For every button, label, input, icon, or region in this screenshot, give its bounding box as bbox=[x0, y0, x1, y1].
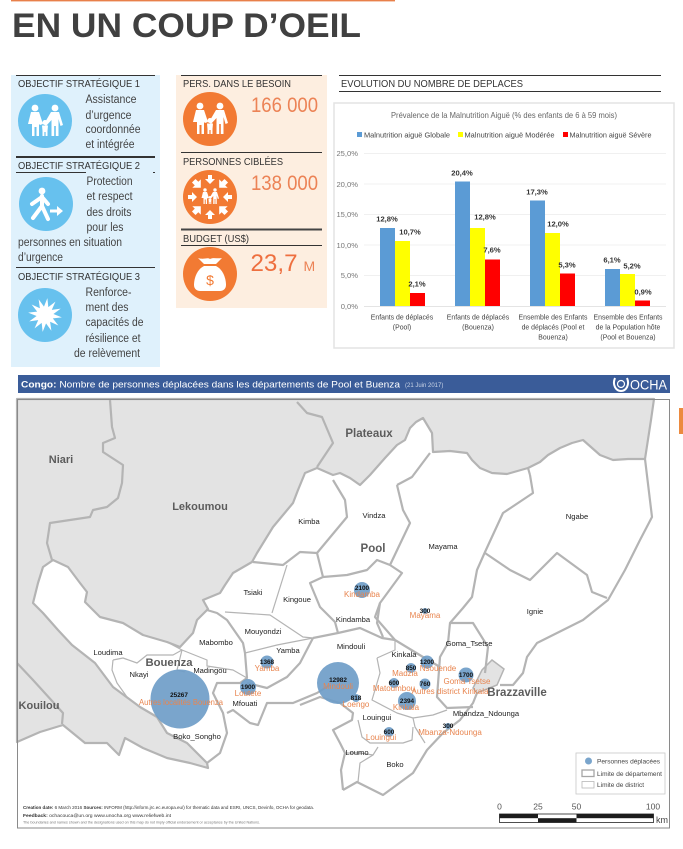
orange locality labels: Nsouende bbox=[420, 664, 457, 673]
map footer notes: Creation date: 6 March 2016 Sources: INFORM (http://inform.jrc.ec.europa.eu/) for thematic data and ESRI, UNCS, Devinfo, OCHA for geodata. bbox=[23, 805, 314, 810]
scale bar: 25 bbox=[533, 802, 543, 812]
objectif stratégique 1: OBJECTIF STRATÉGIQUE 1 bbox=[18, 77, 140, 90]
circle values: 1900 bbox=[241, 684, 256, 691]
circle values: 1368 bbox=[260, 659, 275, 666]
department boundaries bbox=[17, 400, 652, 795]
objectif stratégique 3: OBJECTIF STRATÉGIQUE 3 bbox=[18, 270, 140, 283]
circle values: 2394 bbox=[400, 698, 415, 705]
bars: enfants de déplacés (Pool): 12,8% bbox=[376, 214, 398, 224]
district labels: Loumo bbox=[345, 748, 369, 757]
y axis labels: 25,0% bbox=[336, 149, 358, 158]
chart legend: Malnutrition aiguë Sévère bbox=[570, 130, 652, 140]
map legend: Personnes déplacées bbox=[597, 758, 660, 766]
map footer notes bbox=[23, 805, 314, 824]
category labels bbox=[371, 314, 663, 342]
bars: ensemble des enfants de la population hôte: 6,1% bbox=[603, 256, 621, 264]
title: EN UN COUP D’OEIL bbox=[12, 7, 361, 45]
circle values: 25267 bbox=[170, 692, 188, 699]
budget: BUDGET (US$) bbox=[183, 234, 249, 245]
district labels: Loudima bbox=[93, 648, 123, 657]
y axis labels: 5,0% bbox=[341, 271, 358, 280]
neighbouring departments in gray bbox=[17, 399, 654, 768]
chart legend: Malnutrition aiguë Modérée bbox=[464, 130, 554, 140]
bars: enfants de déplacés (Bouenza): 7,6% bbox=[483, 246, 501, 254]
bars: enfants de déplacés (Bouenza): 20,4% bbox=[451, 168, 473, 178]
chart title: Prévalence de la Malnutrition Aiguë (% des enfants de 6 à 59 mois) bbox=[391, 110, 617, 120]
department labels bbox=[19, 428, 547, 712]
bars: enfants de déplacés (Bouenza) bbox=[451, 168, 501, 306]
district labels: Ngabe bbox=[566, 512, 588, 521]
district labels: Mayama bbox=[428, 542, 458, 551]
chart legend bbox=[357, 130, 652, 140]
orange locality labels: Mindouli bbox=[323, 682, 353, 691]
circle values: 760 bbox=[420, 681, 431, 688]
budget: M bbox=[304, 258, 315, 274]
bars: ensemble des enfants de la population hôte bbox=[603, 256, 652, 306]
scale bar: km bbox=[656, 815, 668, 825]
category labels: (Pool) bbox=[393, 324, 411, 332]
district labels: Kinkala bbox=[392, 650, 417, 659]
orange locality labels: Mbanza-Ndounga bbox=[418, 728, 482, 737]
map title banner bbox=[18, 375, 670, 393]
district labels: Louingui bbox=[363, 713, 392, 722]
bars: enfants de déplacés (Bouenza): 12,8% bbox=[474, 212, 496, 222]
district labels bbox=[93, 511, 588, 769]
objectif stratégique 2: OBJECTIF STRATÉGIQUE 2 bbox=[18, 159, 140, 172]
circle values: 850 bbox=[406, 665, 417, 672]
objectif stratégique 1: coordonnée bbox=[86, 124, 140, 136]
budget: 23,7 bbox=[250, 250, 298, 277]
orange locality labels: Madzia bbox=[392, 669, 418, 678]
district labels: Kimba bbox=[298, 517, 321, 526]
department labels: Bouenza bbox=[145, 657, 193, 669]
map footer notes: Feedback: ochacouca@un.org www.unocha.org www.reliefweb.int bbox=[23, 813, 172, 818]
objectif stratégique 1: Assistance bbox=[86, 94, 136, 106]
personnes ciblées bbox=[181, 152, 322, 224]
objectif stratégique 3: ment des bbox=[86, 302, 129, 314]
scale bar bbox=[497, 802, 668, 825]
department labels: Kouilou bbox=[19, 700, 59, 712]
department labels: Plateaux bbox=[345, 428, 393, 440]
scale bar: 0 bbox=[497, 802, 502, 812]
objectif stratégique 1: et intégrée bbox=[86, 139, 134, 151]
district labels: Mfouati bbox=[233, 699, 258, 708]
orange locality labels: Goma Tsetse bbox=[444, 677, 491, 686]
district labels: Mindouli bbox=[337, 642, 365, 651]
district labels: Yamba bbox=[276, 646, 301, 655]
Brazzaville area bbox=[473, 660, 504, 693]
bars: enfants de déplacés (Pool) bbox=[376, 214, 426, 306]
orange locality labels: Louingui bbox=[366, 733, 396, 742]
y axis labels: 20,0% bbox=[336, 180, 358, 189]
objectif stratégique 2: d’urgence bbox=[18, 252, 63, 264]
district labels: Kindamba bbox=[336, 615, 371, 624]
objectif stratégique 2: pour les bbox=[86, 222, 124, 234]
scale bar: 100 bbox=[646, 802, 660, 812]
y axis labels bbox=[336, 149, 358, 311]
objectif stratégique 2 bbox=[16, 156, 155, 264]
scale bar: 50 bbox=[572, 802, 581, 812]
category labels: Enfants de déplacés bbox=[371, 314, 434, 322]
objectif stratégique 3: Renforce- bbox=[86, 287, 132, 299]
orange locality labels: Yamba bbox=[255, 664, 280, 673]
proportional circles: personnes déplacées bbox=[150, 582, 474, 737]
category labels: Ensemble des Enfants bbox=[594, 314, 663, 322]
y axis labels: 15,0% bbox=[336, 210, 358, 219]
circle values: 300 bbox=[420, 608, 431, 615]
map: déplacés Pool et Bouenza bbox=[17, 399, 670, 828]
panel: chiffres clés bbox=[176, 75, 327, 308]
map title banner: (21 Juin 2017) bbox=[405, 383, 443, 389]
category labels: Bouenza) bbox=[538, 334, 568, 342]
district labels: Nkayi bbox=[130, 670, 149, 679]
heading: évolution du nombre de déplacés: EVOLUTION DU NOMBRE DE DEPLACES bbox=[341, 79, 523, 90]
orange side tab bbox=[679, 408, 683, 434]
bars: ensemble des enfants de la population hôte: 5,2% bbox=[623, 262, 641, 270]
objectif stratégique 2: des droits bbox=[86, 207, 132, 219]
category labels: (Bouenza) bbox=[462, 324, 494, 332]
bar chart: prévalence de la malnutrition aiguë bbox=[334, 103, 674, 348]
orange locality labels: Loutete bbox=[235, 689, 262, 698]
orange locality labels: Autres localités Bouenza bbox=[139, 698, 224, 707]
circle values: 1700 bbox=[459, 672, 474, 679]
objectif stratégique 3: résilience et bbox=[86, 333, 141, 345]
personnes dans le besoin: 166 000 bbox=[251, 93, 318, 117]
map title banner: OCHA bbox=[630, 376, 668, 392]
district labels: Ignie bbox=[527, 607, 543, 616]
bars: ensemble des enfants de déplacés: 5,3% bbox=[558, 260, 576, 270]
personnes dans le besoin: PERS. DANS LE BESOIN bbox=[183, 79, 291, 90]
circle values: 600 bbox=[389, 680, 400, 687]
map legend bbox=[576, 753, 665, 794]
orange locality labels bbox=[139, 590, 491, 742]
personnes ciblées: PERSONNES CIBLÉES bbox=[183, 155, 283, 168]
bars: ensemble des enfants de déplacés: 12,0% bbox=[547, 220, 569, 228]
category labels: de la Population hôte bbox=[596, 324, 661, 332]
department labels: Niari bbox=[49, 454, 73, 466]
district labels: Boko_Songho bbox=[173, 732, 221, 741]
circle values: 12982 bbox=[329, 677, 347, 684]
category labels: de déplacés (Pool et bbox=[522, 324, 584, 332]
personnes ciblées: 138 000 bbox=[251, 171, 318, 195]
district labels: Goma_Tsetse bbox=[446, 639, 492, 648]
category labels: (Pool et Bouenza) bbox=[600, 334, 656, 342]
map legend: Limite de département bbox=[597, 771, 662, 778]
district labels: Madingou bbox=[193, 666, 227, 675]
bars: enfants de déplacés (Pool): 2,1% bbox=[408, 280, 426, 288]
circle values: 300 bbox=[443, 723, 454, 730]
department labels: Brazzaville bbox=[487, 687, 547, 699]
objectif stratégique 3: de relèvement bbox=[74, 348, 141, 360]
icon: UN emblem bbox=[614, 378, 628, 391]
personnes dans le besoin bbox=[181, 75, 322, 146]
objectif stratégique 1: d’urgence bbox=[86, 110, 132, 122]
district labels: Vindza bbox=[362, 511, 386, 520]
y axis labels: 0,0% bbox=[341, 302, 358, 311]
orange locality labels: Autres district Kinkala bbox=[412, 687, 489, 696]
objectif stratégique 1 bbox=[16, 75, 155, 151]
district labels: Mouyondzi bbox=[245, 627, 282, 636]
orange locality labels: Kinkala bbox=[393, 703, 420, 712]
orange locality labels: Matoumbou bbox=[373, 684, 415, 693]
objectif stratégique 2: personnes en situation bbox=[18, 237, 122, 249]
bars: ensemble des enfants de déplacés: 17,3% bbox=[526, 188, 548, 196]
map footer notes: The boundaries and names shown and the designations used on this map do not imply official endorsement or acceptance by the United Nations. bbox=[23, 820, 260, 824]
circle values: 2100 bbox=[355, 585, 370, 592]
objectif stratégique 2: et respect bbox=[86, 191, 133, 203]
department labels: Pool bbox=[361, 543, 385, 555]
map title banner: Congo: Nombre de personnes déplacées dans les départements de Pool et Buenza bbox=[21, 380, 401, 390]
circle values: 600 bbox=[384, 729, 395, 736]
orange locality labels: Mayama bbox=[410, 611, 441, 620]
orange locality labels: Kindamba bbox=[344, 590, 381, 599]
circle values: 818 bbox=[351, 695, 362, 702]
district labels: Mabombo bbox=[199, 638, 233, 647]
objectif stratégique 2: Protection bbox=[86, 176, 132, 188]
circle values bbox=[170, 585, 474, 736]
panel: objectifs stratégiques bbox=[11, 75, 160, 367]
district labels: Tsiaki bbox=[244, 588, 263, 597]
bars: ensemble des enfants de la population hôte: 0,9% bbox=[634, 288, 652, 296]
category labels: Ensemble des Enfants bbox=[519, 314, 588, 322]
objectif stratégique 3 bbox=[16, 267, 155, 360]
category labels: Enfants de déplacés bbox=[447, 314, 510, 322]
district labels: Boko bbox=[386, 760, 404, 769]
map legend: Limite de district bbox=[597, 782, 644, 789]
chart legend: Malnutrition aiguë Globale bbox=[364, 130, 450, 140]
district boundaries bbox=[112, 565, 447, 782]
budget bbox=[181, 228, 322, 301]
budget: $ bbox=[206, 272, 214, 288]
circle values: 1200 bbox=[420, 659, 435, 666]
frame bbox=[18, 400, 670, 828]
bars: ensemble des enfants de déplacés bbox=[526, 188, 576, 306]
department labels: Lekoumou bbox=[172, 501, 228, 513]
y axis labels: 10,0% bbox=[336, 241, 358, 250]
orange locality labels: Loengo bbox=[343, 700, 370, 709]
district labels: Mbandza_Ndounga bbox=[453, 709, 520, 718]
district labels: Kingoue bbox=[283, 595, 311, 604]
bars: enfants de déplacés (Pool): 10,7% bbox=[399, 228, 421, 236]
objectif stratégique 3: capacités de bbox=[86, 317, 144, 329]
